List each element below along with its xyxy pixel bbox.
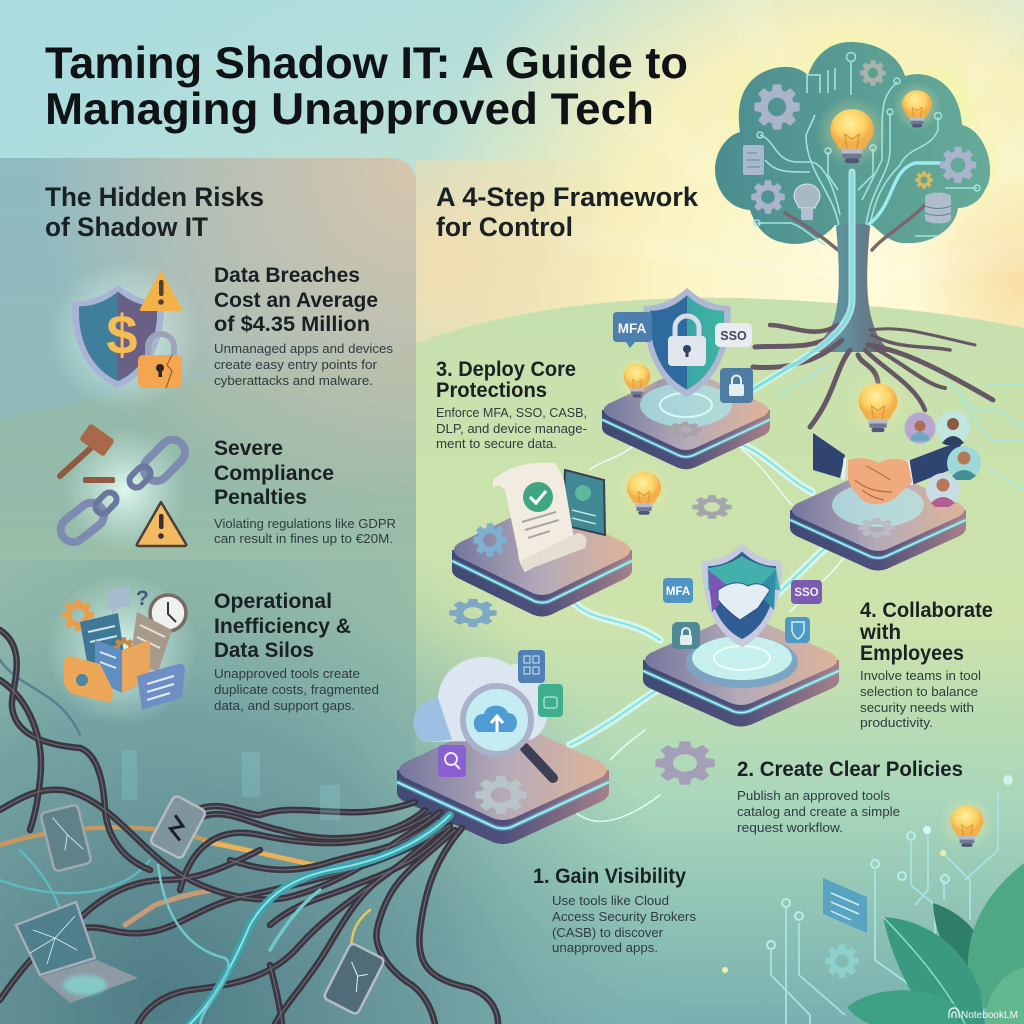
text block: compliance: Violating regulations like GDPR — [214, 516, 396, 531]
text block: data breaches: cyberattacks and malware. — [214, 373, 373, 388]
text block: step 4: productivity. — [860, 715, 933, 730]
text block: data breaches: Unmanaged apps and devices — [214, 341, 394, 356]
text block: step 1: unapproved apps. — [552, 940, 658, 955]
illustration: circuits and leaves bottom right — [722, 775, 1024, 1024]
text block: step 2: Publish an approved tools — [737, 788, 891, 803]
text block: step 4: security needs with — [860, 700, 974, 715]
text block: data breaches: Cost an Average — [214, 289, 378, 312]
text block: data breaches: Data Breaches — [214, 264, 360, 287]
text block: inefficiency: data, and support gaps. — [214, 698, 355, 713]
text block: step 1: 1. Gain Visibility — [533, 865, 686, 888]
icon: folders and clock — [46, 574, 198, 726]
text block: data breaches — [214, 264, 394, 388]
text block: inefficiency: Data Silos — [214, 639, 314, 662]
platform: step 3 shield: SSO — [720, 329, 747, 343]
text block: inefficiency: duplicate costs, fragmented — [214, 682, 379, 697]
heading: framework: for Control — [436, 212, 573, 242]
text block: step 3: DLP, and device manage- — [436, 421, 587, 436]
platform: step 2 shield handshake — [643, 544, 839, 727]
platform: step 2 shield handshake: MFA — [666, 586, 690, 598]
text block: compliance — [214, 437, 396, 546]
text block: step 3 — [436, 358, 587, 451]
title: Taming Shadow IT: A Guide to — [45, 39, 688, 88]
text block: step 2: request workflow. — [737, 820, 843, 835]
heading: hidden risks: of Shadow IT — [45, 212, 208, 242]
icon: data breach shield — [49, 259, 201, 411]
title: Managing Unapproved Tech — [45, 85, 654, 134]
panel: hidden risks background — [0, 158, 416, 830]
text block: step 4: with — [859, 621, 901, 644]
text block: inefficiency: Operational — [214, 590, 332, 613]
text block: step 3: 3. Deploy Core — [436, 358, 576, 381]
text block: compliance: can result in fines up to €20M. — [214, 531, 393, 546]
text block: data breaches: of $4.35 Million — [214, 313, 370, 336]
text block: step 3: Enforce MFA, SSO, CASB, — [436, 405, 587, 420]
platform: collaboration handshake — [790, 372, 981, 571]
platform: policy document — [449, 462, 732, 627]
text block: compliance: Compliance — [214, 462, 334, 485]
heading: framework: A 4-Step Framework — [436, 182, 698, 212]
platform: step 1 visibility — [397, 650, 715, 844]
platform: step 2 shield handshake: SSO — [794, 587, 819, 599]
platform: step 3 shield: MFA — [618, 321, 646, 336]
text block: inefficiency — [214, 590, 379, 713]
text block: step 2 — [737, 758, 963, 835]
text block: step 1: Access Security Brokers — [552, 909, 697, 924]
heading: hidden risks: The Hidden Risks — [45, 182, 264, 212]
text block: step 4: Involve teams in tool — [860, 668, 981, 683]
text block: step 4: Employees — [860, 642, 964, 665]
text block: compliance: Penalties — [214, 486, 307, 509]
text block: step 4: selection to balance — [860, 684, 978, 699]
text block: step 1 — [533, 865, 697, 955]
title — [45, 39, 688, 134]
watermark: NotebookLM — [961, 1009, 1018, 1021]
heading: framework — [436, 182, 698, 242]
text block: step 1: (CASB) to discover — [552, 925, 664, 940]
icon: data breach shield: $ — [106, 303, 138, 366]
text block: step 2: 2. Create Clear Policies — [737, 758, 963, 781]
connectors between platforms — [570, 440, 850, 821]
text block: inefficiency: Unapproved tools create — [214, 666, 360, 681]
illustration: circuit tree — [713, 37, 1024, 490]
icon: folders and clock: ? — [136, 587, 149, 610]
heading: hidden risks — [45, 182, 264, 242]
text block: data breaches: create easy entry points for — [214, 357, 378, 372]
text block: step 4: 4. Collaborate — [860, 599, 993, 622]
icons: broken devices — [16, 750, 385, 1015]
platform: step 3 shield — [602, 288, 770, 469]
text block: step 3: ment to secure data. — [436, 436, 557, 451]
tangled wires — [0, 630, 498, 1024]
icon: gavel and broken chain — [56, 423, 190, 552]
text block: step 1: Use tools like Cloud — [552, 893, 669, 908]
text block: step 4 — [859, 599, 993, 730]
text block: step 3: Protections — [436, 379, 547, 402]
text block: compliance: Severe — [214, 437, 283, 460]
text block: step 2: catalog and create a simple — [737, 804, 900, 819]
text block: inefficiency: Inefficiency & — [214, 615, 351, 638]
